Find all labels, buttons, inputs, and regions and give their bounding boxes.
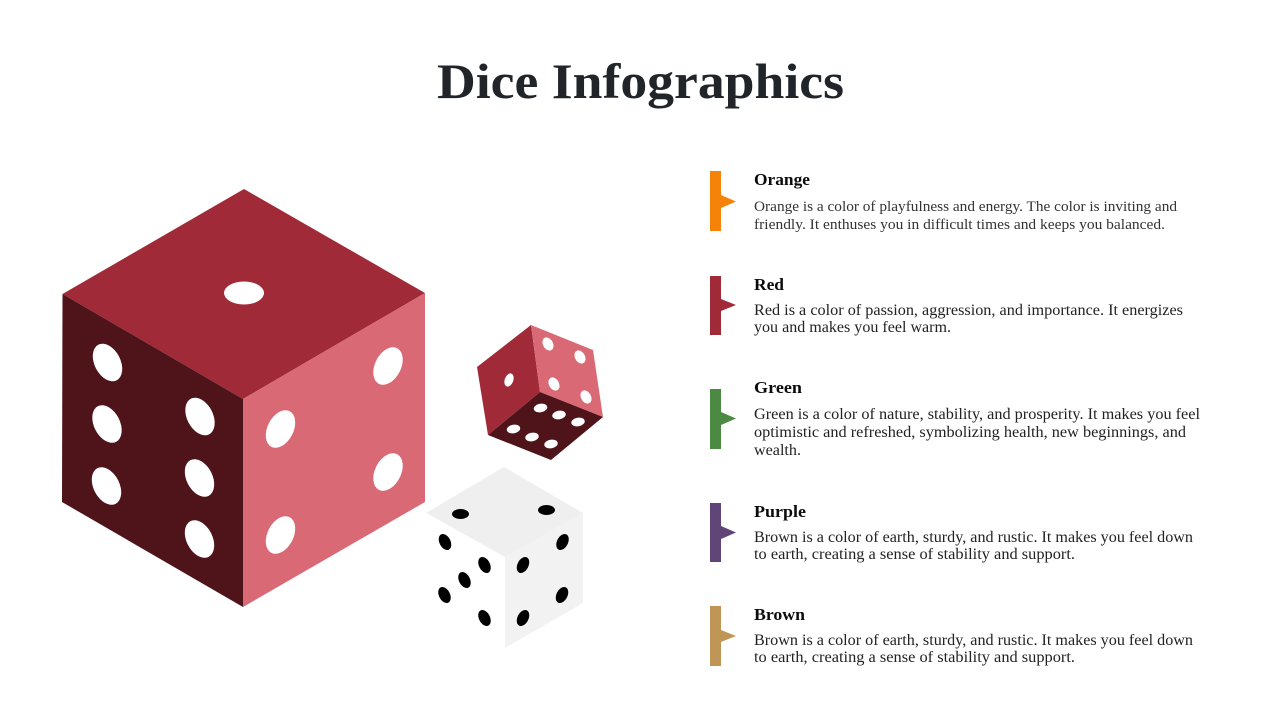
title: Dice Infographics xyxy=(437,53,844,109)
text: orange description: Orange is a color of playfulness and energy. The color is inviting and xyxy=(754,199,1178,215)
heading: green: Green xyxy=(754,378,803,397)
icon: orange flag marker xyxy=(710,171,736,231)
panel: orange item xyxy=(710,170,1178,233)
panel: purple item xyxy=(710,502,1193,563)
panel: green item xyxy=(710,378,1200,459)
text: brown description xyxy=(754,632,1193,666)
heading: orange: Orange xyxy=(754,170,810,189)
icon: white die xyxy=(426,467,583,648)
icon: red flag marker xyxy=(710,276,736,335)
heading: purple: Purple xyxy=(754,502,806,521)
text: brown description: to earth, creating a sense of stability and support. xyxy=(754,649,1075,666)
heading: brown: Brown xyxy=(754,605,806,624)
text: green description: optimistic and refreshed, symbolizing health, new beginnings, and xyxy=(754,424,1186,441)
text: purple description: Brown is a color of earth, sturdy, and rustic. It makes you feel down xyxy=(754,529,1193,546)
text: brown description: Brown is a color of earth, sturdy, and rustic. It makes you feel down xyxy=(754,632,1193,649)
icon: green flag marker xyxy=(710,389,736,449)
text: red description xyxy=(754,302,1183,336)
heading: red: Red xyxy=(754,275,785,294)
icon: large red die xyxy=(62,189,425,607)
text: green description xyxy=(754,406,1200,459)
text: orange description: friendly. It enthuses you in difficult times and keeps you balanced. xyxy=(754,217,1165,233)
icon: small tilted red die xyxy=(477,325,603,460)
icon: brown flag marker xyxy=(710,606,736,666)
text: purple description xyxy=(754,529,1193,563)
text: red description: you and makes you feel warm. xyxy=(754,319,951,336)
text: orange description xyxy=(754,199,1178,233)
text: purple description: to earth, creating a sense of stability and support. xyxy=(754,546,1075,563)
panel: brown item xyxy=(710,605,1193,666)
text: red description: Red is a color of passion, aggression, and importance. It energizes xyxy=(754,302,1183,319)
icon: purple flag marker xyxy=(710,503,736,562)
text: green description: Green is a color of nature, stability, and prosperity. It makes you feel xyxy=(754,406,1200,423)
panel: red item xyxy=(710,275,1183,336)
text: green description: wealth. xyxy=(754,442,801,459)
